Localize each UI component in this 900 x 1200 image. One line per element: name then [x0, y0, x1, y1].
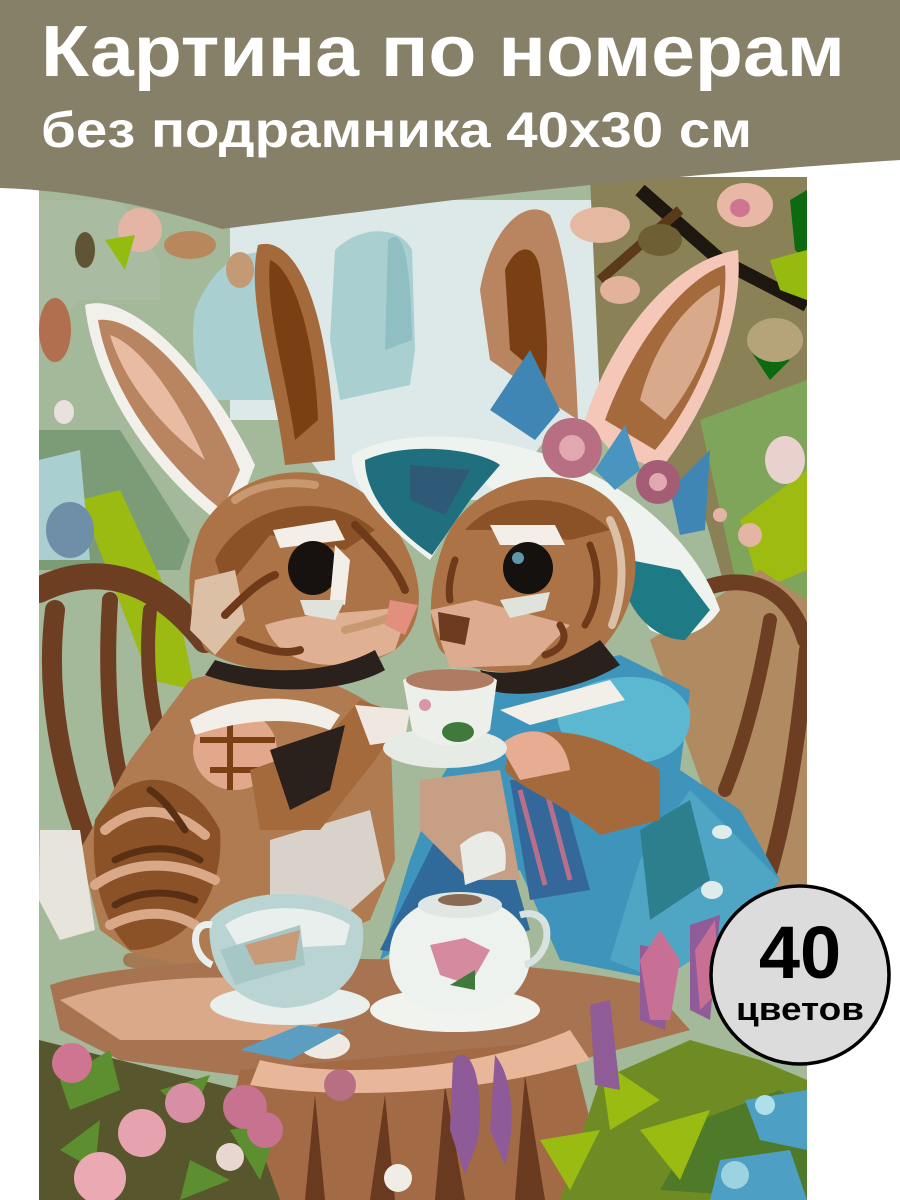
- body: [80, 670, 395, 980]
- arm: [505, 732, 660, 835]
- hat: [352, 436, 720, 636]
- teacup and saucer: [383, 669, 507, 768]
- header banner: [0, 0, 900, 229]
- chairs: [39, 576, 807, 870]
- teapots: [196, 892, 547, 1060]
- head: [189, 472, 419, 672]
- left rabbit: [39, 244, 419, 980]
- head: [431, 477, 635, 672]
- right rabbit: [352, 209, 780, 980]
- tail: [39, 830, 95, 940]
- dress: [380, 655, 780, 980]
- blossom branches: [39, 183, 807, 558]
- badge: 40 colours: [711, 886, 889, 1064]
- painting: rabbits at a tea party: [39, 177, 807, 1200]
- ears: [85, 303, 255, 530]
- badge: 40 colours: цветов: [736, 991, 864, 1027]
- flowers and foliage: [39, 915, 807, 1200]
- ears: [480, 209, 578, 420]
- subtitle: без подрамника 40х30 см: [41, 102, 752, 158]
- fur stripes: [95, 790, 215, 972]
- badge: 40 colours: 40: [759, 911, 841, 994]
- bows and flowers: [490, 350, 560, 440]
- title: Картина по номерам: [41, 12, 845, 92]
- table: [50, 959, 690, 1200]
- garden background: [39, 177, 807, 1200]
